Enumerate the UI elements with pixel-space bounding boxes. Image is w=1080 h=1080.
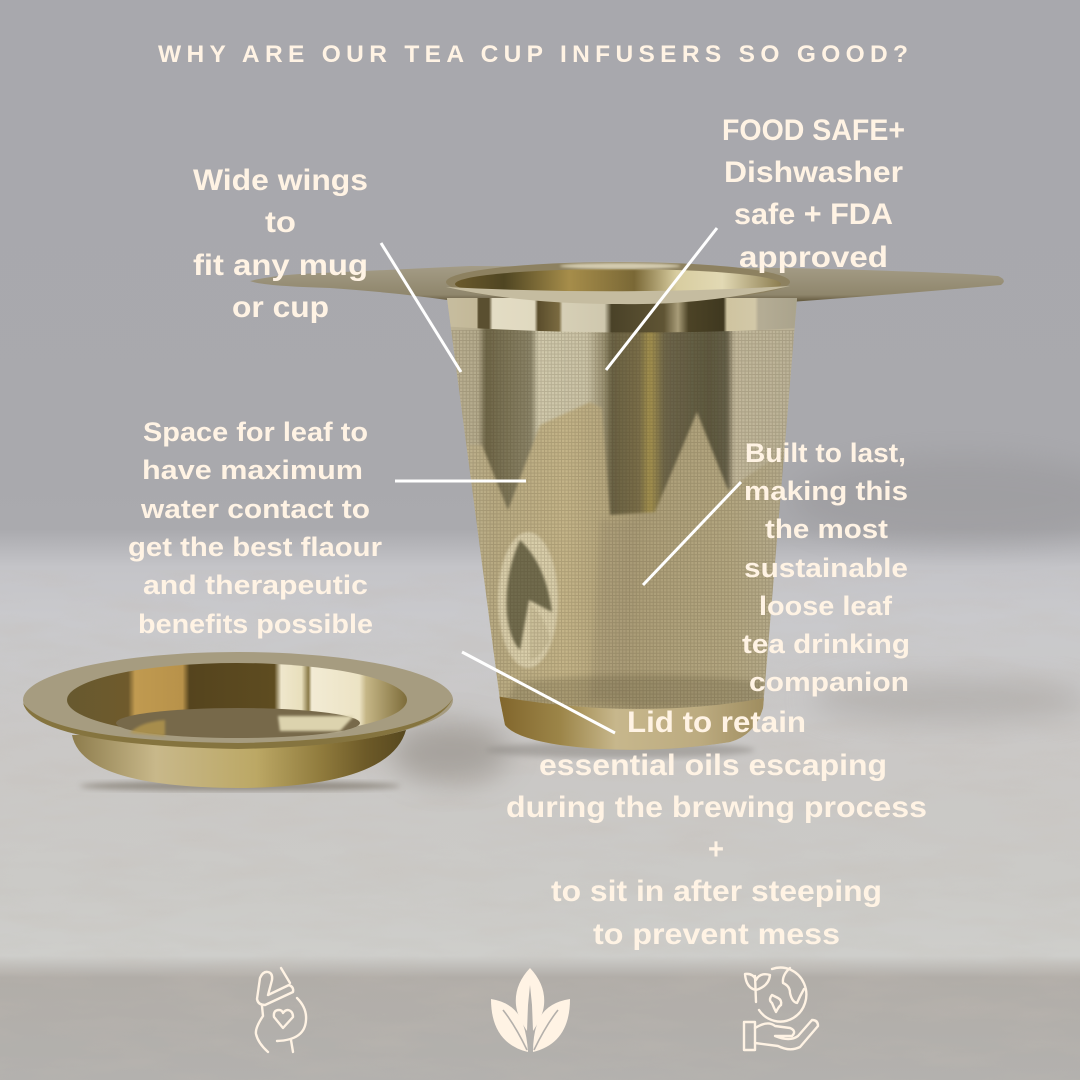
callout: food safe	[722, 114, 905, 274]
callout: food safe: safe + FDA	[734, 198, 893, 231]
callout: wide wings: to	[265, 206, 296, 239]
icon: earth in hand	[744, 968, 818, 1050]
callout: food safe: approved	[739, 241, 888, 274]
arrow: wings pointer	[381, 243, 461, 372]
icon: pregnancy	[256, 968, 306, 1052]
callout: space for leaf: Space for leaf to	[143, 417, 368, 447]
callout: food safe: Dishwasher	[724, 156, 903, 189]
callout: built to last: Built to last,	[745, 438, 906, 468]
callout: built to last: loose leaf	[759, 591, 893, 621]
callout: space for leaf: get the best flaour	[128, 532, 383, 562]
arrow: leaf space pointer	[395, 480, 526, 482]
callout: built to last: making this	[744, 476, 908, 506]
callout: lid: to sit in after steeping	[551, 875, 882, 908]
callout: built to last	[742, 438, 910, 697]
callout: wide wings: or cup	[232, 291, 329, 324]
callout: lid: during the brewing process	[506, 791, 927, 824]
icon: tea leaves	[491, 968, 570, 1052]
callout: space for leaf	[128, 417, 383, 639]
callout: space for leaf: and therapeutic	[143, 570, 368, 600]
callout: built to last: the most	[765, 514, 888, 544]
title: WHY ARE OUR TEA CUP INFUSERS SO GOOD?	[158, 41, 908, 68]
callout: wide wings: fit any mug	[193, 249, 368, 282]
callout: built to last: companion	[749, 667, 909, 697]
callout: wide wings	[193, 164, 368, 324]
callout: lid: to prevent mess	[593, 918, 840, 951]
arrow: lid pointer	[462, 652, 615, 733]
callout: space for leaf: water contact to	[140, 494, 370, 524]
callout: space for leaf: benefits possible	[138, 609, 373, 639]
photo: tea cup infuser	[250, 262, 1004, 760]
callout: built to last: tea drinking	[742, 629, 910, 659]
callout: wide wings: Wide wings	[193, 164, 368, 197]
callout: lid: +	[708, 833, 724, 866]
arrow: built to last pointer	[643, 482, 741, 585]
callout: lid: essential oils escaping	[539, 749, 887, 782]
callout: lid: Lid to retain	[627, 706, 806, 739]
callout: food safe: FOOD SAFE+	[722, 114, 905, 147]
photo: lid of the infuser	[23, 652, 453, 791]
callout: built to last: sustainable	[744, 553, 908, 583]
callout: lid	[506, 706, 927, 951]
callout: space for leaf: have maximum	[142, 455, 363, 485]
arrow: food safe pointer	[606, 228, 717, 370]
